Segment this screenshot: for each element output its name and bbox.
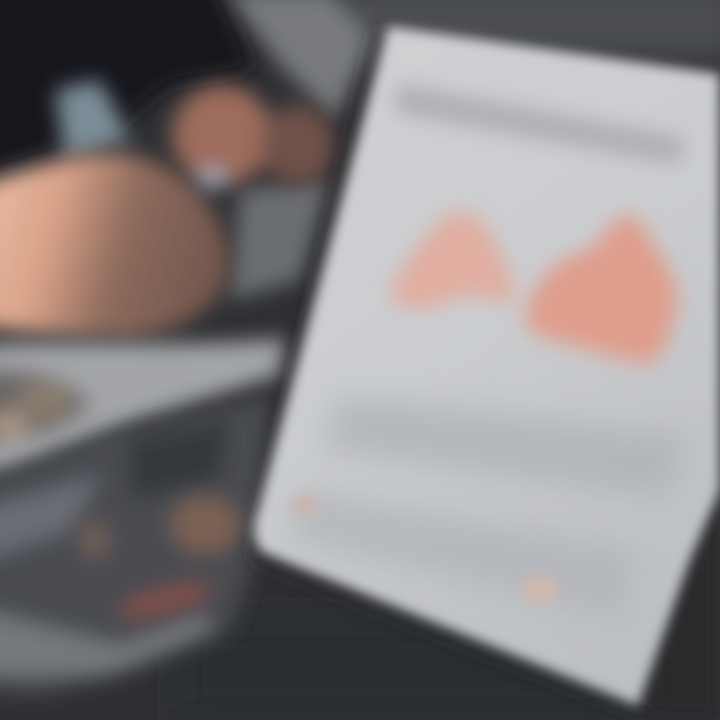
hand: fingertip: [172, 85, 334, 189]
grey backdrop behind hand: [55, 0, 375, 300]
chart: faint lower table: [290, 395, 690, 620]
chart: small pink marks: [291, 495, 558, 604]
basket contents: [79, 495, 241, 626]
paper shadow: [250, 30, 720, 720]
chart: pink peaks: [388, 212, 678, 365]
dark sleeve top left: [0, 0, 255, 170]
basket body: [0, 395, 270, 695]
basket rim: [0, 338, 285, 480]
paper title smudge: [394, 84, 685, 165]
hand: palm: [0, 153, 230, 338]
panel: paper sheet: [254, 26, 720, 706]
